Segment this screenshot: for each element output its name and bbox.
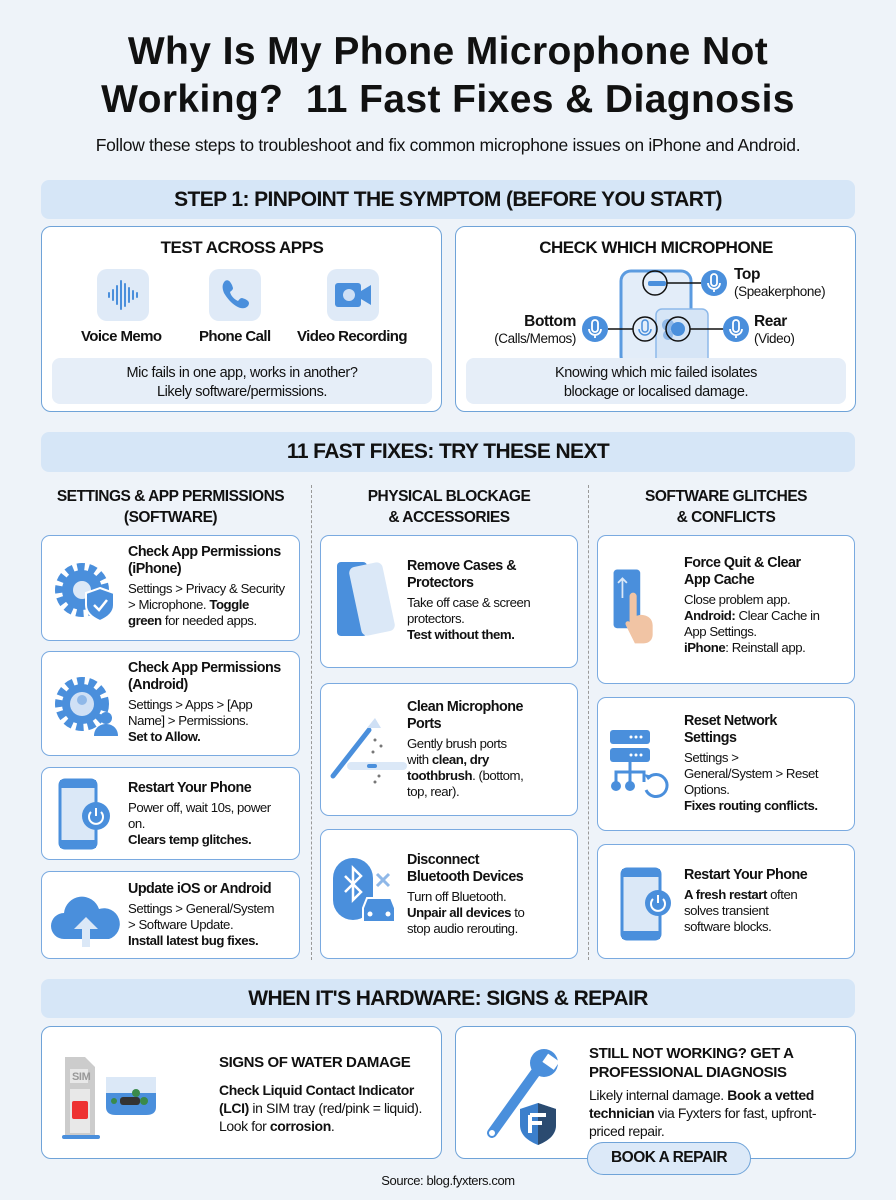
text: water damage: SIGNS OF WATER DAMAGE (219, 1054, 410, 1071)
heading: CHECK WHICH MICROPHONE (539, 238, 773, 257)
column heading: physical (368, 488, 530, 526)
card: permissions iphone (41, 535, 300, 641)
column heading: glitches: SOFTWARE GLITCHES (645, 488, 807, 505)
card: permissions iphone: green for needed apps. (128, 613, 257, 628)
card: permissions iphone: Settings > Privacy & Security (128, 581, 285, 596)
icon: phone power (58, 778, 110, 850)
card: permissions iphone: (iPhone) (128, 561, 181, 577)
panel: check which microphone (455, 226, 856, 412)
card: restart phone: on. (128, 816, 145, 831)
card: permissions iphone: Check App Permissions (128, 544, 281, 560)
labels: Phone Call (199, 328, 271, 345)
card: reset network: Options. (684, 782, 730, 797)
title (101, 30, 795, 121)
card: reset network: Fixes routing conflicts. (684, 798, 818, 813)
card: bluetooth: Turn off Bluetooth. (407, 889, 506, 904)
card: reset network: Settings > (684, 750, 739, 765)
band: hardware (41, 979, 855, 1018)
text: diagnosis: Likely internal damage. Book a vetted technician via Fyxters for fast, upfront-priced repair. (589, 1087, 816, 1139)
card: force quit: Android: Clear Cache in (684, 608, 819, 623)
panel: test across apps (41, 226, 442, 412)
card: restart phone 2: solves transient (684, 903, 768, 918)
card: remove cases: Remove Cases & (407, 558, 516, 574)
card: update os: Install latest bug fixes. (128, 933, 258, 948)
icon: gear shield (55, 563, 114, 620)
column heading: glitches (645, 488, 807, 526)
card: reset network (597, 697, 855, 831)
title: Why Is My Phone Microphone Not (128, 30, 768, 73)
card: clean ports: with clean, dry (407, 752, 489, 767)
card: remove cases: Protectors (407, 575, 474, 591)
text: water damage: Check Liquid Contact Indicator (LCI) in SIM tray (red/pink = liquid). Look for corrosion. (219, 1082, 422, 1134)
button: book a repair: BOOK A REPAIR (611, 1149, 727, 1166)
column heading: software (57, 488, 284, 526)
card: clean ports: Ports (407, 716, 441, 732)
band: 11 fast fixes: 11 FAST FIXES: TRY THESE NEXT (287, 440, 609, 463)
button: book a repair (587, 1142, 751, 1175)
card: force quit: Force Quit & Clear (684, 555, 801, 571)
card: restart phone: Power off, wait 10s, power (128, 800, 271, 815)
card: clean ports: toothbrush. (bottom, (407, 768, 523, 783)
icon: sim tray & water: SIM (72, 1071, 91, 1083)
text: diagnosis (589, 1045, 816, 1139)
card: reset network: Settings (684, 730, 736, 746)
icon: bluetooth car (333, 858, 394, 921)
icon: phone call (209, 269, 261, 321)
card: restart phone: Clears temp glitches. (128, 832, 251, 847)
label: bottom: (Calls/Memos) (494, 331, 576, 346)
heading: TEST ACROSS APPS (161, 238, 323, 257)
icon: voice memo (97, 269, 149, 321)
card: bluetooth: Disconnect (407, 852, 479, 868)
card: permissions iphone: > Microphone. Toggle (128, 597, 249, 612)
icon: phone case (337, 562, 395, 636)
note (52, 358, 432, 404)
card: bluetooth: Bluetooth Devices (407, 869, 523, 885)
card: update os: Settings > General/System (128, 901, 274, 916)
column heading: software: SETTINGS & APP PERMISSIONS (57, 488, 284, 505)
card: update os: Update iOS or Android (128, 881, 271, 897)
icon: gear user (55, 677, 118, 736)
subtitle: Follow these steps to troubleshoot and fix common microphone issues on iPhone and Android. (96, 135, 800, 155)
band: 11 fast fixes (41, 432, 855, 472)
card: restart phone (41, 767, 300, 860)
label: bottom: Bottom (524, 313, 576, 330)
column heading: glitches: & CONFLICTS (677, 509, 775, 526)
panel: professional diagnosis (455, 1026, 856, 1159)
card: restart phone 2: software blocks. (684, 919, 771, 934)
label: top (734, 266, 825, 299)
icon: wrench shield (487, 1049, 558, 1145)
text: diagnosis: PROFESSIONAL DIAGNOSIS (589, 1064, 787, 1081)
card: remove cases: protectors. (407, 611, 464, 626)
card: clean ports: Clean Microphone (407, 699, 523, 715)
card: remove cases: Take off case & screen (407, 595, 530, 610)
note: Knowing which mic failed isolates (555, 365, 757, 381)
card: permissions android: Settings > Apps > [App (128, 697, 252, 712)
icon: video recording (327, 269, 379, 321)
text: diagnosis: STILL NOT WORKING? GET A (589, 1045, 794, 1062)
note: blockage or localised damage. (564, 384, 748, 400)
note: Mic fails in one app, works in another? (126, 365, 358, 381)
band: hardware: WHEN IT'S HARDWARE: SIGNS & REPAIR (248, 987, 648, 1010)
note: Likely software/permissions. (157, 384, 327, 400)
labels (81, 328, 407, 345)
card: permissions android (41, 651, 300, 756)
card: force quit: iPhone: Reinstall app. (684, 640, 805, 655)
card: bluetooth: stop audio rerouting. (407, 921, 518, 936)
card: bluetooth: Unpair all devices to (407, 905, 524, 920)
card: update os (41, 871, 300, 959)
card: permissions android: Check App Permissions (128, 660, 281, 676)
icon: sim tray & water (62, 1057, 156, 1139)
card: permissions android: Name] > Permissions. (128, 713, 248, 728)
source: Source: blog.fyxters.com (381, 1173, 515, 1188)
label: bottom (494, 313, 576, 346)
card: remove cases: Test without them. (407, 627, 514, 642)
card: reset network: Reset Network (684, 713, 777, 729)
text: water damage (219, 1054, 422, 1134)
column heading: software: (SOFTWARE) (124, 509, 217, 526)
note (466, 358, 846, 404)
card: restart phone 2: Restart Your Phone (684, 867, 807, 883)
label: rear (754, 313, 794, 346)
label: top: Top (734, 266, 760, 283)
column heading: physical: PHYSICAL BLOCKAGE (368, 488, 530, 505)
card: restart phone 2 (597, 844, 855, 959)
card: remove cases (320, 535, 578, 668)
card: update os: > Software Update. (128, 917, 233, 932)
card: permissions android: (Android) (128, 677, 188, 693)
label: rear: (Video) (754, 331, 794, 346)
card: permissions android: Set to Allow. (128, 729, 200, 744)
card: force quit (597, 535, 855, 684)
title: Working? 11 Fast Fixes & Diagnosis (101, 78, 795, 121)
card: force quit: Close problem app. (684, 592, 790, 607)
card: reset network: General/System > Reset (684, 766, 818, 781)
band: step 1: STEP 1: PINPOINT THE SYMPTOM (BEFORE YOU START) (174, 188, 722, 211)
panel: water damage (41, 1026, 442, 1159)
labels: Voice Memo (81, 328, 161, 345)
labels: Video Recording (297, 328, 407, 345)
label: top: (Speakerphone) (734, 284, 825, 299)
card: clean ports (320, 683, 578, 816)
card: clean ports: Gently brush ports (407, 736, 507, 751)
icon: network (610, 730, 669, 798)
label: rear: Rear (754, 313, 787, 330)
icon: cloud upload (51, 896, 120, 947)
column heading: physical: & ACCESSORIES (388, 509, 510, 526)
icon: toothbrush (330, 718, 407, 784)
card: force quit: App Cache (684, 572, 754, 588)
card: bluetooth (320, 829, 578, 959)
card: restart phone 2: A fresh restart often (684, 887, 797, 902)
card: clean ports: top, rear). (407, 784, 459, 799)
band: step 1 (41, 180, 855, 219)
card: restart phone: Restart Your Phone (128, 780, 251, 796)
diagram: phone mics (582, 270, 749, 358)
icon: tap hand (614, 570, 653, 644)
icon: phone power (620, 868, 671, 940)
card: force quit: App Settings. (684, 624, 757, 639)
